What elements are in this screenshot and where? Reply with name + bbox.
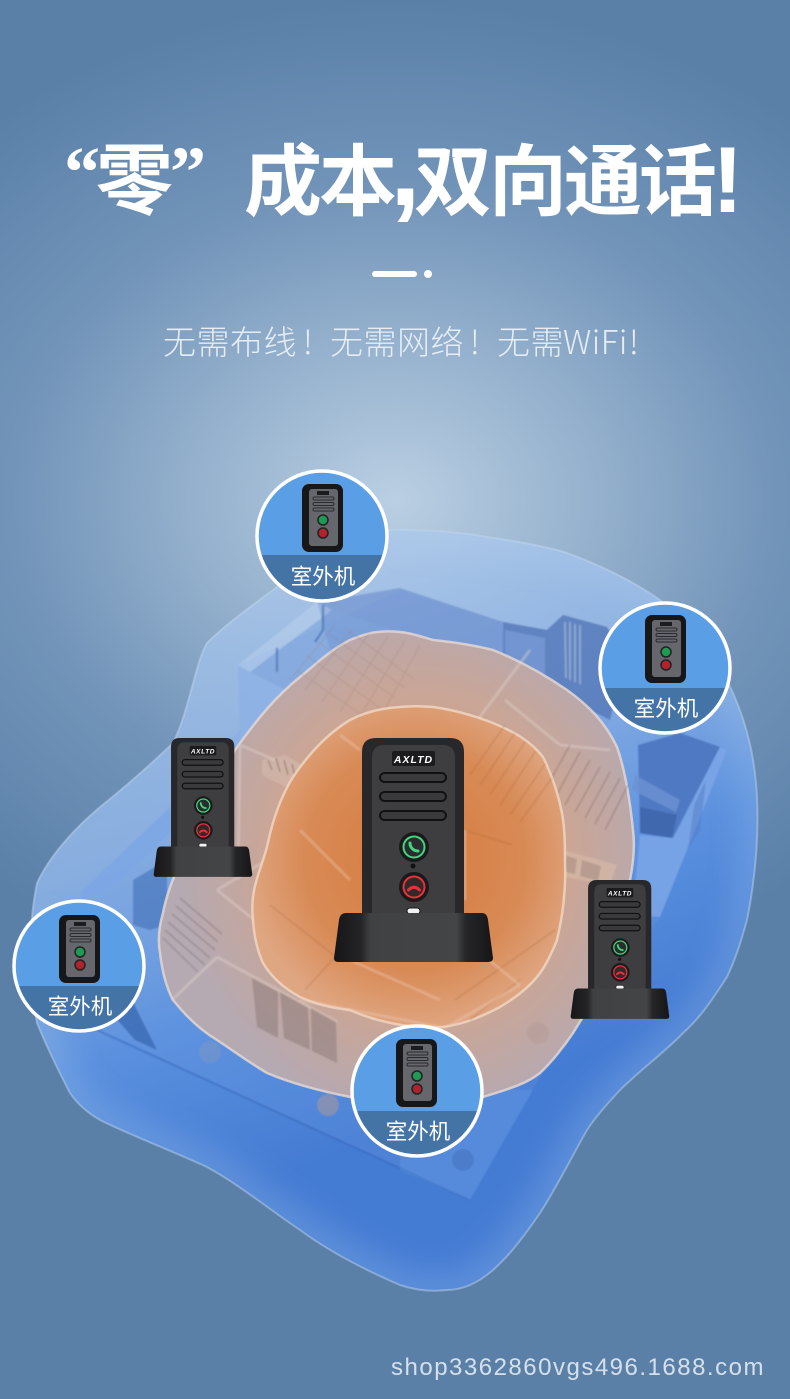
indicator light [407,908,420,914]
green call button [399,832,429,862]
outdoor unit device [59,915,100,983]
label: 室外机 [291,565,356,589]
detail: shrubs in mid zone [317,1022,549,1116]
detail: storage boxes [277,800,323,850]
subtitle: ! [629,316,639,364]
house: bottom tile terrace [400,1087,533,1200]
desk intercom: center [334,738,493,962]
subtitle [163,316,639,364]
detail: inner pale walls [300,735,520,1028]
zone: outer blue coverage [30,530,758,1291]
title: 双向通话 [414,138,715,226]
title: ! [712,127,743,232]
house: terrace tree [452,1149,474,1171]
subtitle: ! [470,316,480,364]
outdoor unit device [396,1039,437,1107]
house: back wall [317,588,503,660]
red hang-up button [399,872,429,902]
subtitle: WiFi [563,316,628,364]
label: 室外机 [634,697,699,721]
inner-zone house details [270,725,555,1028]
desk intercom: right: AXLTD [607,890,632,897]
subtitle: 无需 [497,316,564,364]
detail: shelves on right [525,840,617,885]
outdoor unit badge: bottom [352,1026,482,1158]
detail: closet room [262,755,353,815]
desk intercom: left: AXLTD [190,748,215,755]
charging base [334,913,493,962]
label: 室外机 [48,995,113,1019]
subtitle: 无需网络 [330,316,464,364]
detail: right floorboards [545,745,628,830]
detail: tile grid [290,625,420,722]
logo: AXLTD [393,754,433,766]
title: 成本 [244,138,395,226]
outdoor unit badge: left [14,901,144,1033]
title: “ [64,132,100,212]
zone: inner orange core [252,706,565,1028]
desk intercom: right [571,880,669,1019]
house: curtain room [503,615,625,720]
title divider: dash and dot [372,270,432,278]
house: ground floor area [80,590,727,1200]
outdoor unit device [645,615,686,683]
house: study room on the right [638,733,720,838]
desk intercom: left [154,738,252,877]
house: lower-left wall and garden [80,807,173,895]
subtitle: ! [303,316,313,364]
shop URL watermark: shop3362860vgs496.1688.com [391,1354,765,1381]
title [64,106,743,232]
zone: middle translucent orange [159,631,634,1106]
zone: outer edge glow [37,688,756,1290]
detail: inner floorboards and walls [270,725,555,1020]
coverage map: signal zones over the house plan [30,530,758,1291]
house: dark lower windows [113,1000,157,1050]
outdoor unit device [302,484,343,552]
subtitle: 无需布线 [163,316,297,364]
title: , [390,106,421,229]
house floor plan [80,588,727,1200]
house: lower-left shrub [199,1041,221,1063]
title: 零 [96,139,173,225]
house: upper-left wall and room [238,602,332,672]
label: 室外机 [386,1120,451,1144]
outdoor unit badge: top [257,471,387,602]
speaker slots [380,773,446,820]
title: ” [170,132,206,212]
mid-zone house details [163,625,628,1022]
outdoor unit badge: right [600,603,730,735]
detail: pale walls [172,650,610,1022]
detail: left floorboards [163,898,222,972]
house: right exterior wall [632,747,727,917]
detail: grey lower windows [252,978,337,1063]
